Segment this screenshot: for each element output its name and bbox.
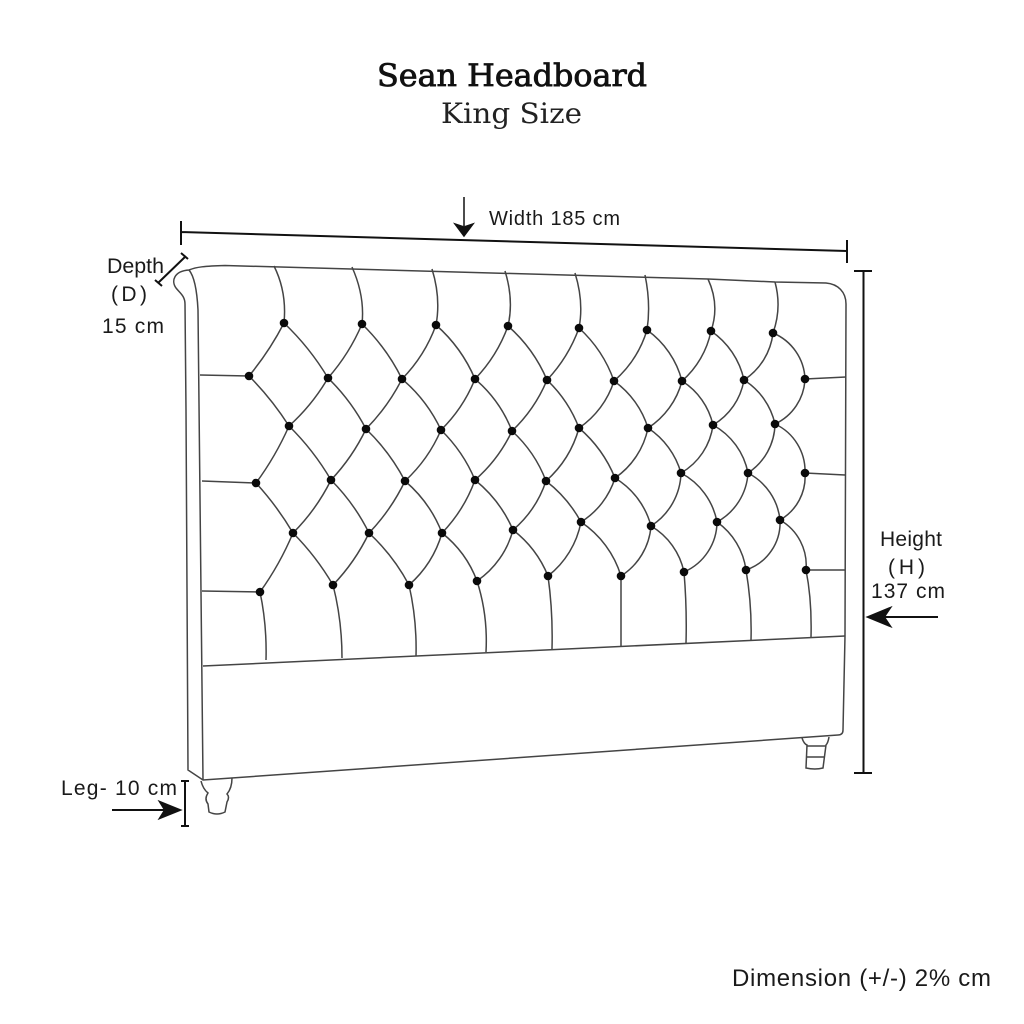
height label — [871, 528, 945, 603]
side pleats — [200, 375, 846, 592]
width dimension line — [181, 221, 847, 263]
height dimension line — [854, 271, 872, 773]
height label: 137 cm — [871, 580, 945, 603]
tufting lines right — [579, 330, 806, 576]
right leg — [802, 737, 829, 769]
lower band line — [203, 636, 845, 666]
headboard outer frame — [174, 266, 846, 780]
headboard drawing — [174, 266, 846, 814]
dimension tolerance note: Dimension (+/-) 2% cm — [732, 965, 991, 992]
left leg — [201, 778, 232, 814]
depth label — [102, 255, 164, 338]
pleats to top edge — [274, 266, 778, 333]
leg label: Leg- 10 cm — [61, 777, 177, 800]
pleats to lower band — [260, 570, 811, 660]
leg dimension line — [181, 781, 189, 826]
title: Sean Headboard — [377, 58, 647, 94]
width arrow — [455, 197, 473, 236]
leg arrow — [112, 802, 180, 818]
depth label: Depth — [107, 255, 164, 278]
width label: Width 185 cm — [489, 208, 620, 230]
height label: Height — [880, 528, 942, 551]
depth dimension line — [155, 253, 188, 286]
inner side panel line — [189, 270, 203, 780]
subtitle: King Size — [441, 97, 582, 130]
tufting lines middle — [402, 325, 621, 585]
tufting lines left — [249, 323, 409, 592]
tufting buttons — [245, 319, 810, 596]
height label: ( H ) — [888, 556, 925, 579]
height arrow — [868, 608, 938, 626]
depth label: ( D ) — [111, 283, 147, 306]
depth label: 15 cm — [102, 315, 164, 338]
